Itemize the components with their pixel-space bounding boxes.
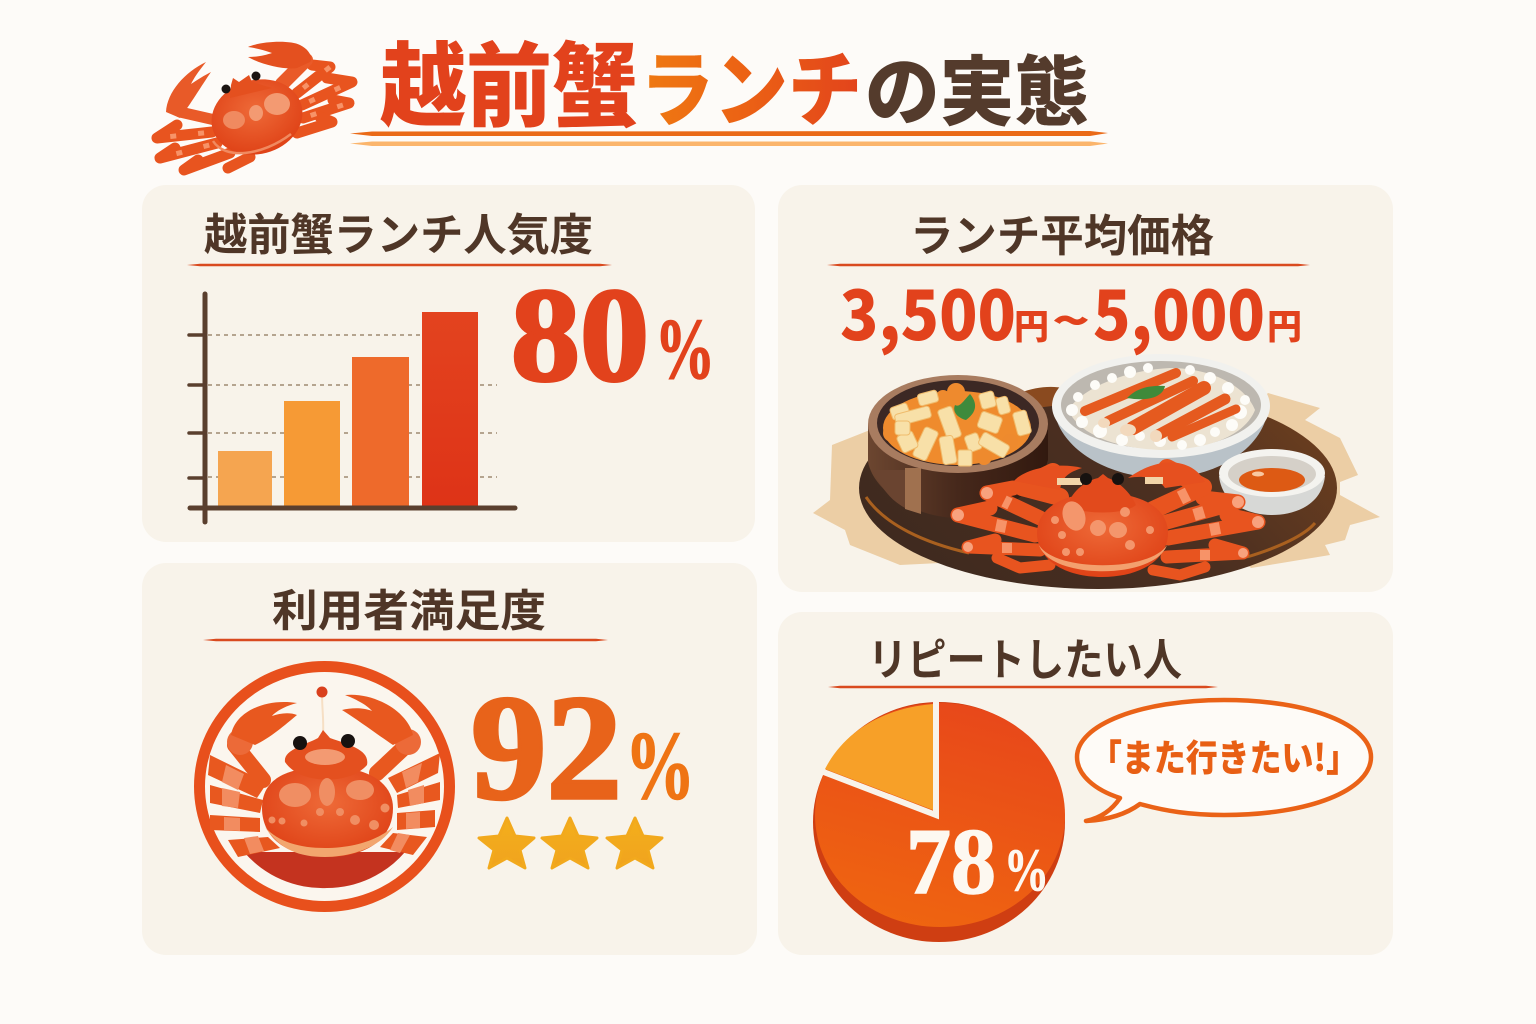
panel: popularity bbox=[142, 185, 755, 542]
pie value bbox=[906, 810, 1049, 914]
price range: 円 bbox=[1014, 299, 1049, 350]
heading underline bbox=[187, 264, 612, 266]
stat: 92%: 92 bbox=[471, 665, 622, 831]
heading: satisfaction: 利用者満足度 bbox=[272, 587, 546, 636]
price range bbox=[840, 261, 1302, 360]
bowl: diced crab mix bbox=[868, 375, 1048, 518]
title: 越前蟹 bbox=[380, 13, 638, 146]
pie chart bbox=[813, 702, 1065, 942]
heading: popularity: 越前蟹ランチ人気度 bbox=[204, 211, 593, 260]
heading underline bbox=[828, 686, 1218, 688]
bubble text: 「また行きたい!」 bbox=[1090, 728, 1358, 782]
pie value: % bbox=[1004, 837, 1049, 903]
price range: ~ bbox=[1052, 286, 1090, 350]
dish: sauce bbox=[1219, 449, 1325, 515]
heading: price: ランチ平均価格 bbox=[910, 212, 1214, 261]
price range: 3,500 bbox=[840, 261, 1016, 360]
panel: satisfaction bbox=[142, 563, 757, 955]
panel: price bbox=[778, 185, 1393, 592]
title bbox=[380, 13, 1089, 146]
bowl: rice with crab legs bbox=[1052, 354, 1270, 478]
heading: repeat: リピートしたい人 bbox=[868, 636, 1182, 685]
plate crab bbox=[952, 462, 1264, 577]
heading underline bbox=[827, 264, 1310, 266]
stat: 92%: % bbox=[625, 712, 695, 819]
title underline bbox=[350, 131, 1108, 146]
price range: 5,000 bbox=[1093, 261, 1265, 360]
stat: 80%: % bbox=[655, 301, 715, 397]
speech bubble bbox=[1077, 700, 1371, 821]
title: の実態 bbox=[865, 31, 1089, 141]
icon: title crab bbox=[157, 42, 352, 170]
price range: 円 bbox=[1267, 299, 1302, 350]
pie value: 78 bbox=[906, 810, 996, 914]
bar chart bbox=[189, 294, 515, 522]
illustration: crab lunch set bbox=[813, 354, 1380, 589]
badge: crab in circle bbox=[200, 666, 450, 906]
rating stars bbox=[479, 818, 662, 868]
title: ランチ bbox=[640, 24, 862, 143]
stat: 80% bbox=[511, 261, 715, 409]
stat: 92% bbox=[471, 665, 695, 831]
panel: repeat bbox=[778, 612, 1393, 955]
stat: 80%: 80 bbox=[511, 261, 649, 409]
heading underline bbox=[203, 639, 608, 641]
